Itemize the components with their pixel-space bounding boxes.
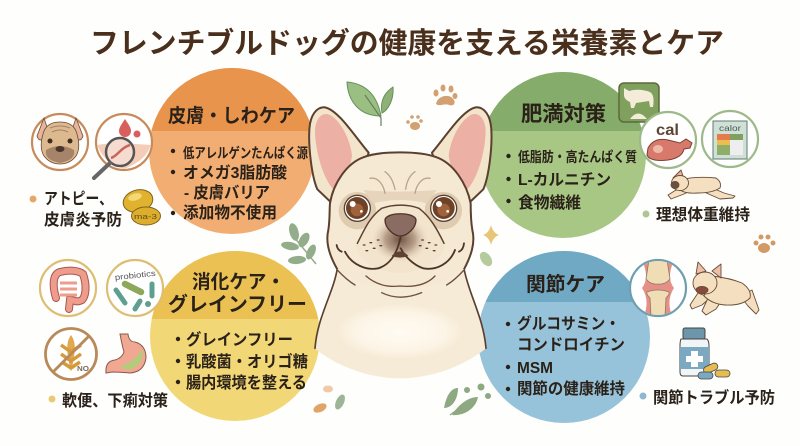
chest outline xyxy=(315,268,486,348)
bullet list: obesity: 低脂肪・高たんぱく質 xyxy=(518,149,637,165)
icon: knee joint xyxy=(630,260,686,316)
circle header band xyxy=(486,251,632,302)
chest highlight xyxy=(335,303,465,360)
bullet list: joints: 関節の健康維持 xyxy=(517,379,625,398)
bullet list: joints: MSM xyxy=(517,360,553,377)
muzzle folds xyxy=(357,205,444,243)
circle header band xyxy=(152,251,318,319)
chest xyxy=(315,268,486,378)
whisker dots xyxy=(363,240,437,251)
left ear xyxy=(309,107,369,202)
bullet list: joints: グルコサミン・ xyxy=(517,314,620,333)
wrinkles xyxy=(370,172,430,193)
label: ideal weight: 理想体重維持 xyxy=(656,206,750,224)
panel: joints xyxy=(480,251,650,423)
tongue area xyxy=(392,251,408,258)
bullet list: skin care: 添加物不使用 xyxy=(183,204,277,222)
bullet list: obesity: L-カルニチン xyxy=(518,171,611,189)
decoration: paw large xyxy=(434,84,458,105)
bullet list: skin care xyxy=(171,145,308,222)
icon: wrinkled dog face xyxy=(32,114,88,170)
bullet list: skin care: オメガ3脂肪酸 xyxy=(183,164,287,182)
icon: capsules xyxy=(698,362,730,379)
decoration: left sprig xyxy=(280,222,318,265)
bullet list: skin care: 低アレルゲンたんぱく源 xyxy=(183,145,308,161)
icon: probiotics: probiotics xyxy=(114,269,156,282)
decoration: bottom left leaves xyxy=(312,386,347,415)
label: atopy prevention xyxy=(30,190,122,229)
panel: obesity xyxy=(486,72,646,238)
right ear xyxy=(432,107,492,202)
circle body xyxy=(149,68,315,234)
head outline xyxy=(327,152,473,269)
circle body xyxy=(480,72,646,238)
icon: supplement bottle xyxy=(680,328,709,376)
circle header band xyxy=(152,68,310,131)
eye left xyxy=(344,195,370,221)
nose xyxy=(385,214,416,236)
circle header band xyxy=(490,72,642,131)
panel: skin care xyxy=(149,68,312,234)
icon: calorie chart xyxy=(702,111,758,167)
bullet list: digestion: 乳酸菌・オリゴ糖 xyxy=(186,352,308,371)
icon: calorie meat xyxy=(640,112,696,168)
circle body xyxy=(150,251,320,421)
title: フレンチブルドッグの健康を支える栄養素とケア xyxy=(90,26,724,60)
decoration: bottom right leaf and paw xyxy=(444,384,491,415)
icon: omega-3 capsules: ma-3 xyxy=(134,212,157,221)
bullet list: obesity: 食物繊維 xyxy=(518,193,581,212)
icon: no grain: NO xyxy=(77,364,89,373)
forehead shade xyxy=(363,190,437,203)
decoration: paw small xyxy=(406,115,423,130)
icon: stomach xyxy=(106,334,146,373)
decoration: small leaf right xyxy=(477,250,495,268)
bullet list: skin care: - 皮膚バリア xyxy=(184,184,270,202)
heading: digestion xyxy=(168,271,307,316)
icon: food tray xyxy=(619,83,659,122)
heading: skin care: 皮膚・しわケア xyxy=(168,105,295,127)
heading: digestion: 消化ケア・ xyxy=(192,271,285,293)
label: joint trouble prevention: 関節トラブル予防 xyxy=(653,388,775,407)
bullet list: joints xyxy=(506,314,625,398)
heading: obesity: 肥満対策 xyxy=(521,103,606,126)
central dog illustration xyxy=(309,107,492,378)
eye right xyxy=(431,195,457,221)
icon: probiotics xyxy=(107,260,163,316)
decoration: paw right xyxy=(754,234,776,253)
label: atopy prevention: アトピー、 xyxy=(44,190,113,208)
head fill xyxy=(327,152,473,288)
icon: no grain xyxy=(46,328,96,380)
bullet list: digestion xyxy=(176,330,308,392)
bullet list: digestion: 腸内環境を整える xyxy=(186,374,307,392)
decoration: sparkle xyxy=(483,225,499,245)
icon: skin magnifier xyxy=(94,114,152,178)
label: soft stool: 軟便、下痢対策 xyxy=(62,391,168,410)
mouth xyxy=(337,237,464,269)
icon: running dog xyxy=(668,170,735,199)
muzzle cream xyxy=(356,205,445,273)
eye patch right xyxy=(425,192,462,229)
label: atopy prevention: 皮膚炎予防 xyxy=(44,211,122,229)
chin lines xyxy=(337,270,464,297)
icon: intestines xyxy=(40,260,96,316)
icon: happy dog xyxy=(690,262,759,315)
bullet list: joints: コンドロイチン xyxy=(517,336,625,354)
eye patch left xyxy=(339,192,376,229)
panel: digestion xyxy=(150,251,319,421)
bullet list: obesity xyxy=(506,149,637,212)
icon: calorie meat: cal xyxy=(656,122,679,139)
heading: joints: 関節ケア xyxy=(526,273,605,296)
icon: calorie chart: calor xyxy=(719,124,741,133)
icon: omega-3 capsules xyxy=(121,186,160,225)
decoration: top leaves xyxy=(347,82,393,126)
circle body xyxy=(478,251,650,423)
muzzle shade xyxy=(371,215,429,263)
bullet list: digestion: グレインフリー xyxy=(186,330,293,349)
heading: digestion: グレインフリー xyxy=(168,292,307,316)
